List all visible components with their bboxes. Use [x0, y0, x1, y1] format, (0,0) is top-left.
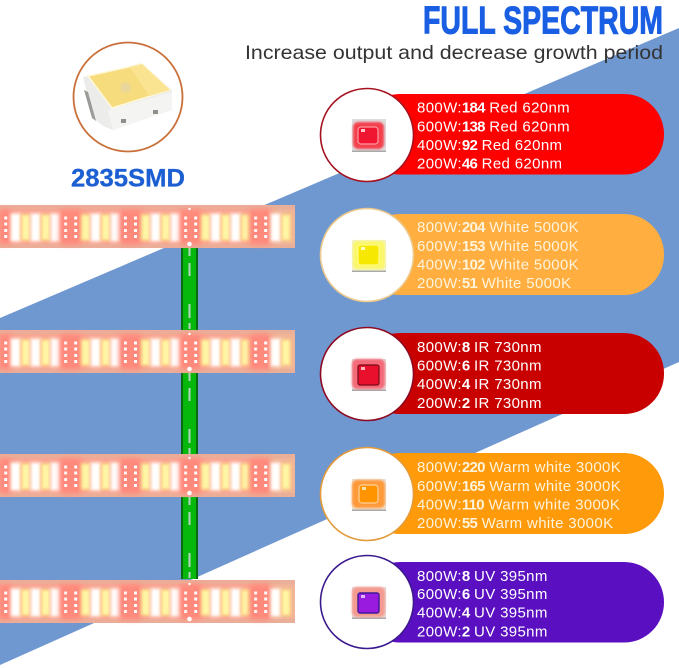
text: UV counts: 6 UV 395nm — [462, 586, 548, 603]
LED bar 1 — [0, 205, 295, 248]
connector strip: middle — [181, 373, 198, 455]
text: UV counts: 200W: — [417, 624, 462, 640]
panel: IR 730nm — [320, 328, 664, 420]
icon: warm white LED — [352, 479, 386, 511]
text: white counts: 153 White 5000K — [462, 238, 579, 255]
icon: 2835 SMD chip — [74, 42, 182, 152]
text: warm white counts: 55 Warm white 3000K — [462, 515, 613, 532]
label: 2835SMD: 2835SMD — [71, 164, 185, 192]
text: white counts: 200W: — [417, 275, 462, 292]
text: IR counts: 6 IR 730nm — [462, 358, 542, 374]
text: white counts: 600W: — [417, 238, 462, 255]
text: warm white counts: 110 Warm white 3000K — [462, 496, 620, 514]
subtitle: Increase output and decrease growth period — [245, 42, 663, 64]
panel: warm white 3000K — [320, 448, 664, 540]
text: red counts: 92 Red 620nm — [462, 137, 562, 154]
text: red counts: 800W: — [417, 100, 462, 117]
text: white counts: 400W: — [417, 256, 462, 274]
panel: red 620nm — [320, 88, 664, 182]
text: IR counts: 8 IR 730nm — [462, 339, 542, 356]
text: white counts: 51 White 5000K — [462, 275, 571, 292]
text: white counts: 102 White 5000K — [462, 256, 579, 274]
text: warm white counts: 800W: — [417, 459, 462, 476]
text: IR counts: 2 IR 730nm — [462, 395, 542, 412]
text: white counts: 800W: — [417, 219, 462, 236]
icon: red LED — [352, 119, 386, 152]
text: UV counts: 800W: — [417, 568, 462, 585]
text: IR counts: 4 IR 730nm — [462, 376, 542, 393]
panel: UV 395nm — [320, 556, 664, 648]
text: warm white counts: 165 Warm white 3000K — [462, 478, 621, 495]
icon: white LED — [352, 240, 386, 272]
text: white counts: 204 White 5000K — [462, 219, 579, 236]
text: red counts: 184 Red 620nm — [462, 100, 570, 117]
text: red counts: 46 Red 620nm — [462, 156, 562, 173]
text: UV counts: 600W: — [417, 586, 462, 603]
connector strip: bottom — [181, 497, 198, 579]
text: IR counts: 400W: — [417, 376, 462, 393]
panel: white 5000K — [320, 208, 664, 302]
text: UV counts: 4 UV 395nm — [462, 605, 548, 622]
text: warm white counts: 220 Warm white 3000K — [462, 459, 621, 476]
text: UV counts: 2 UV 395nm — [462, 624, 548, 640]
text: warm white counts: 200W: — [417, 515, 462, 532]
LED bar 2 — [0, 330, 295, 373]
text: red counts: 600W: — [417, 118, 462, 136]
text: IR counts: 600W: — [417, 358, 462, 374]
text: red counts: 400W: — [417, 137, 462, 154]
icon: IR LED — [352, 359, 386, 391]
text: warm white counts: 400W: — [417, 496, 462, 514]
connector strip: top — [181, 248, 198, 330]
LED bar 3 — [0, 454, 295, 497]
icon: UV LED — [352, 587, 386, 619]
text: IR counts: 800W: — [417, 339, 462, 356]
text: IR counts: 200W: — [417, 395, 462, 412]
LED bar 4 — [0, 580, 295, 623]
text: UV counts: 400W: — [417, 605, 462, 622]
text: warm white counts: 600W: — [417, 478, 462, 495]
text: red counts: 200W: — [417, 156, 462, 173]
text: UV counts: 8 UV 395nm — [462, 568, 548, 585]
text: red counts: 138 Red 620nm — [462, 118, 570, 136]
